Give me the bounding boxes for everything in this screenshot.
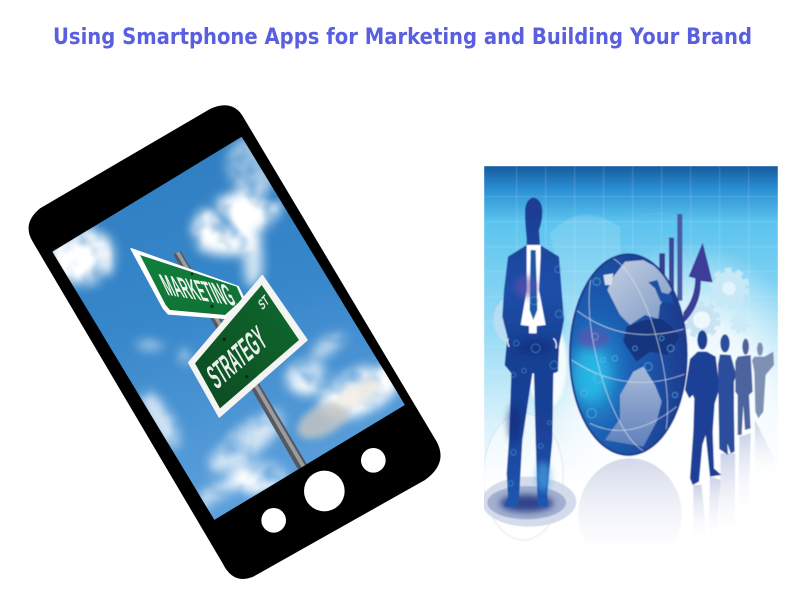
shirt xyxy=(521,245,546,333)
sign: strategy: ST xyxy=(256,292,271,314)
gears xyxy=(687,272,748,335)
sign: strategy: STRATEGY xyxy=(202,319,272,397)
sign: marketing: MARKETING xyxy=(155,268,241,313)
pocket highlights xyxy=(508,338,556,348)
circular chart lines xyxy=(618,213,710,272)
globe xyxy=(570,249,687,460)
sign: strategy xyxy=(189,276,307,417)
person 2 xyxy=(718,334,736,455)
globe reflection xyxy=(578,458,682,524)
background grid xyxy=(484,166,778,322)
left button xyxy=(261,508,286,533)
smartphone illustration xyxy=(29,105,441,579)
floor shadow under man xyxy=(482,477,576,527)
gears, chart, arrow and people are positioned relative to the globe area xyxy=(618,213,774,485)
home button xyxy=(304,471,345,511)
suit network rings xyxy=(508,266,563,486)
businessman silhouette xyxy=(502,197,564,507)
person 4 xyxy=(752,342,774,418)
globe highlights xyxy=(572,347,608,403)
person 1 xyxy=(685,330,721,485)
sign: marketing: RE xyxy=(227,292,239,307)
phone screen: marketing strategy photo xyxy=(48,137,408,520)
right button xyxy=(361,448,386,473)
rising bar chart xyxy=(659,214,682,301)
sign pole xyxy=(173,251,307,470)
picture background xyxy=(484,166,778,479)
globe network rings xyxy=(581,278,678,418)
business people and globe picture xyxy=(482,166,778,572)
globe grid lines xyxy=(570,249,687,460)
clouds xyxy=(48,137,408,514)
tie xyxy=(530,250,537,320)
land masses xyxy=(607,260,672,325)
phone body xyxy=(29,105,441,579)
suit glow xyxy=(514,276,537,297)
rising arrow xyxy=(683,243,713,323)
person 3 xyxy=(735,339,753,435)
sign: marketing xyxy=(131,249,244,318)
shaded cloud base xyxy=(294,398,352,443)
people reflections xyxy=(693,420,770,520)
